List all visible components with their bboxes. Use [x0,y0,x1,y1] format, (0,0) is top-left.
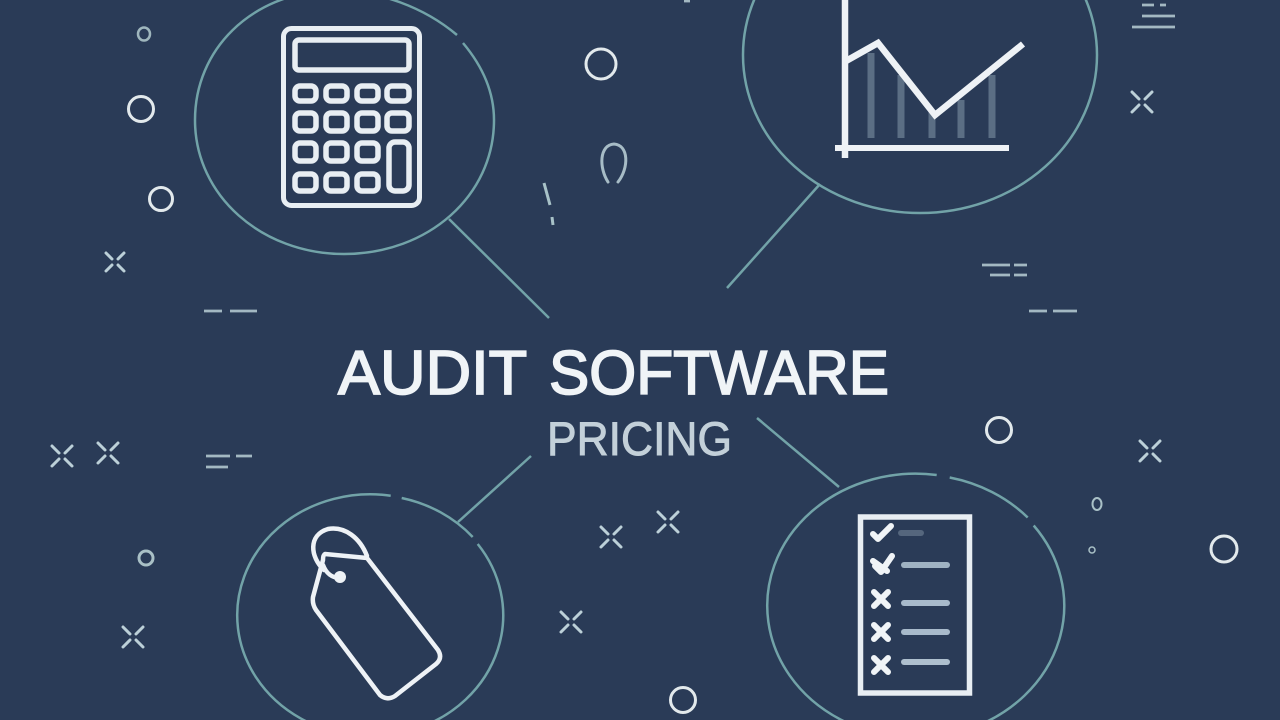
icon: calculator [284,28,420,206]
icon: checklist [860,517,970,693]
check marks [873,526,892,672]
title: AUDIT [338,339,526,408]
checklist circle [767,474,1064,720]
panel: price tag [237,456,531,720]
list lines [901,533,947,662]
chart connector [727,184,820,288]
panel: checklist [757,418,1064,720]
icon: price tag [313,529,440,698]
tag connector [458,456,531,522]
panel: calculator [195,0,549,318]
calculator connector [449,219,549,318]
panel: line chart [727,0,1097,288]
chart circle [743,0,1097,213]
tag circle [237,494,503,720]
checklist connector [757,418,839,487]
decorative crosses [52,92,1160,647]
icon: line chart [835,0,1023,158]
calculator circle [195,0,494,254]
title: SOFTWARE [549,339,889,408]
decorative dashes [204,1,1175,467]
subtitle: PRICING [547,412,732,465]
